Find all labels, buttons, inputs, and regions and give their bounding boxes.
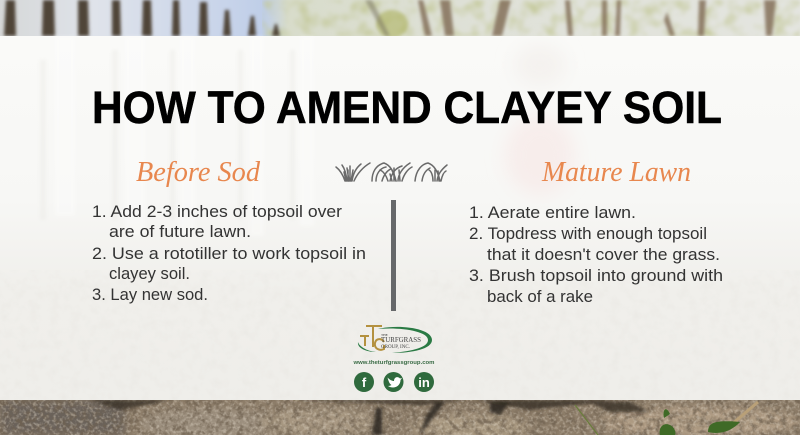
icon: twitter xyxy=(384,372,404,392)
icon: facebook xyxy=(354,372,374,392)
text block: mature lawn steps: 1. Aerate entire lawn. xyxy=(469,204,636,222)
background photo: fence and trees xyxy=(0,0,800,38)
heading: Before Sod: Before Sod xyxy=(136,157,261,188)
text block: before sod steps: 2. Use a rototiller to work topsoil in xyxy=(92,245,366,263)
text block: before sod steps xyxy=(92,203,366,304)
text block: mature lawn steps: 2. Topdress with enough topsoil xyxy=(469,225,707,243)
text block: mature lawn steps: that it doesn't cover the grass. xyxy=(487,246,720,264)
icon: green leaves xyxy=(660,409,740,435)
text block: mature lawn steps: back of a rake xyxy=(487,288,593,306)
text block: before sod steps: are of future lawn. xyxy=(109,223,251,241)
logo: The Turfgrass Group: GROUP, INC. xyxy=(381,344,411,350)
bottom soil photo band xyxy=(0,400,800,435)
logo: The Turfgrass Group xyxy=(358,326,432,353)
logo: The Turfgrass Group: THE xyxy=(381,333,388,337)
icon: linkedin: in xyxy=(418,375,430,390)
website url: www.theturfgrassgroup.com xyxy=(352,360,435,366)
text block: before sod steps: clayey soil. xyxy=(109,265,190,283)
text block: mature lawn steps: 3. Brush topsoil into ground with xyxy=(469,267,723,285)
icon: linkedin xyxy=(414,372,434,392)
text block: mature lawn steps xyxy=(469,204,723,306)
icon: grass tufts xyxy=(336,163,447,181)
title: HOW TO AMEND CLAYEY SOIL xyxy=(92,82,722,133)
heading: Mature Lawn: Mature Lawn xyxy=(541,157,691,188)
text block: before sod steps: 1. Add 2-3 inches of topsoil over xyxy=(92,203,343,221)
text block: before sod steps: 3. Lay new sod. xyxy=(92,286,208,304)
vertical divider xyxy=(391,200,396,311)
logo: The Turfgrass Group: TURFGRASS xyxy=(381,336,421,344)
icon: facebook: f xyxy=(362,375,367,390)
